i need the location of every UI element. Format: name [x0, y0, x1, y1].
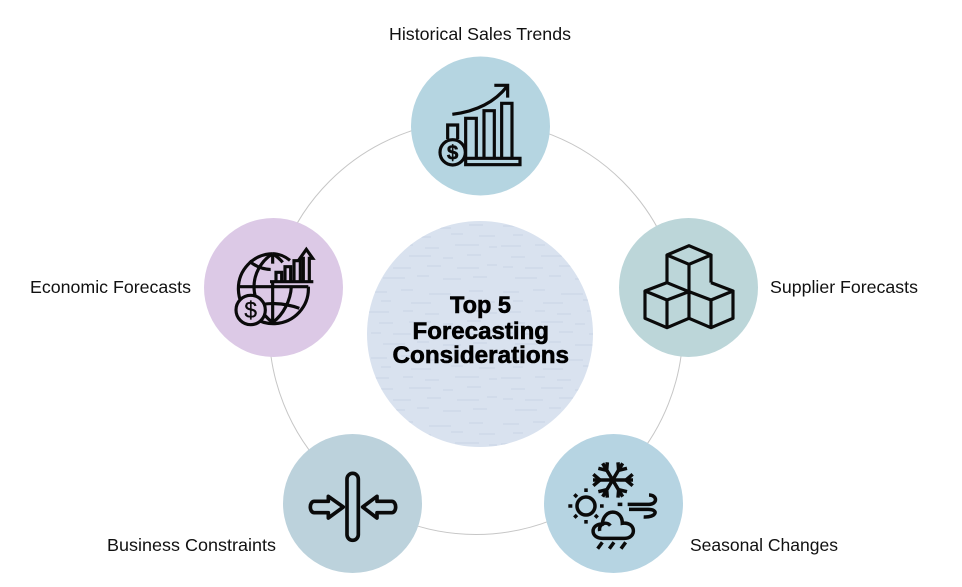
- icon: globe with chart and coin: $: [244, 297, 257, 323]
- icon: weather: [568, 462, 655, 549]
- panel: supplier forecasts: [619, 218, 758, 357]
- panel: historical sales trends: [411, 56, 550, 196]
- label: supplier forecasts: Supplier Forecasts: [770, 277, 918, 297]
- panel: center circle: [367, 221, 593, 447]
- title: Considerations: [392, 342, 569, 369]
- title: Top 5: [450, 292, 511, 319]
- title: [392, 292, 569, 369]
- panel: business constraints: [283, 434, 422, 573]
- icon: arrows pressing on bar: [310, 473, 396, 540]
- label: business constraints: Business Constraints: [107, 535, 276, 555]
- panel: seasonal changes: [544, 434, 683, 573]
- icon: rising bar chart with coin: $: [447, 142, 459, 165]
- label: economic forecasts: Economic Forecasts: [30, 277, 191, 297]
- icon: stacked cubes: [645, 246, 733, 328]
- label: seasonal changes: Seasonal Changes: [690, 535, 838, 555]
- panel: economic forecasts: [204, 218, 343, 357]
- label: historical sales trends: Historical Sales Trends: [389, 24, 571, 44]
- connecting ring: [269, 120, 683, 534]
- title: Forecasting: [412, 318, 549, 345]
